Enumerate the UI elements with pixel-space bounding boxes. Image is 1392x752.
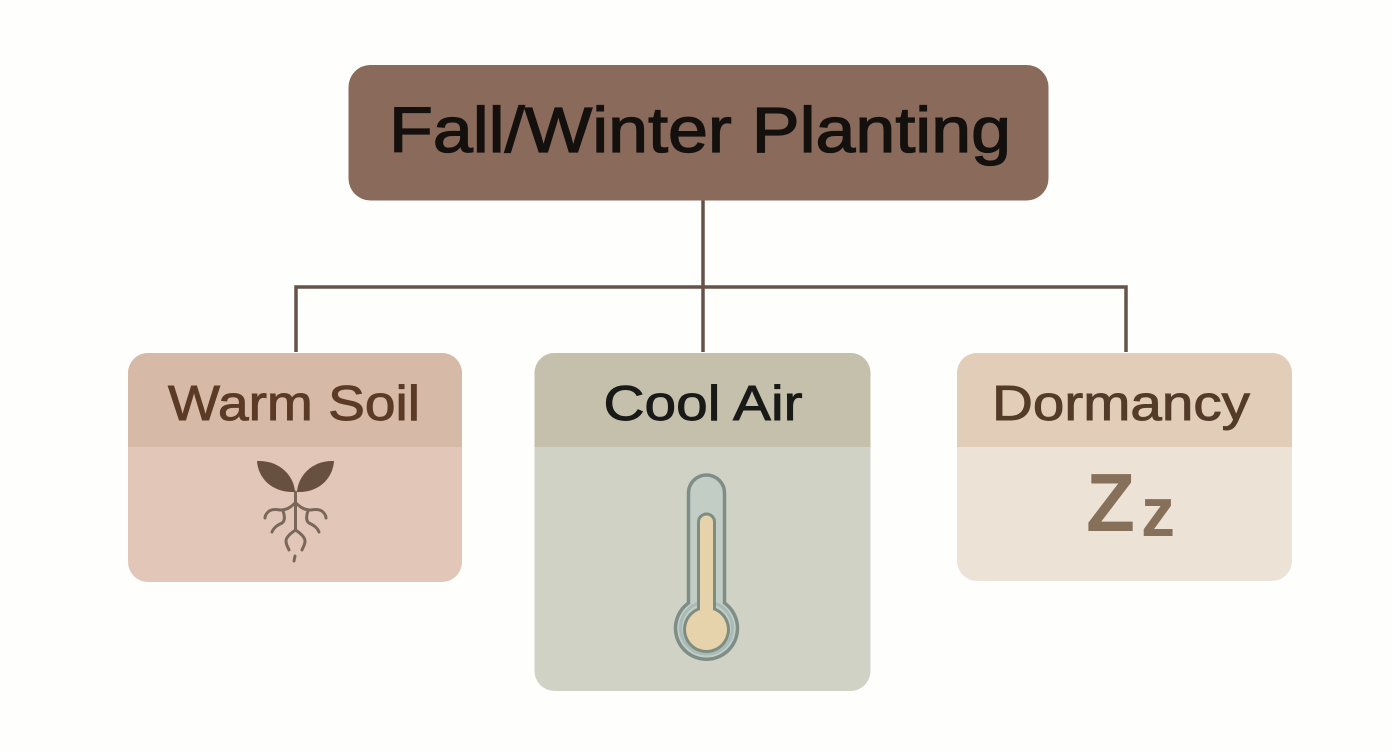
- title text: Fall/Winter Planting: [389, 94, 1011, 166]
- title box: [348, 65, 1048, 200]
- cool air heading: Cool Air: [604, 377, 802, 431]
- icon: seedling with roots: [257, 461, 334, 561]
- panel: cool air: [534, 353, 870, 691]
- icon: Zz sleep letters: Z: [1086, 456, 1135, 549]
- dormancy heading: Dormancy: [992, 377, 1251, 431]
- icon: Zz sleep letters: [1086, 456, 1175, 551]
- icon: thermometer: [676, 475, 738, 659]
- warm soil heading: Warm Soil: [168, 377, 420, 431]
- panel: dormancy: [957, 353, 1292, 581]
- panel: warm soil: [128, 353, 462, 582]
- icon: Zz sleep letters: z: [1141, 473, 1175, 551]
- connector lines: [296, 200, 1126, 352]
